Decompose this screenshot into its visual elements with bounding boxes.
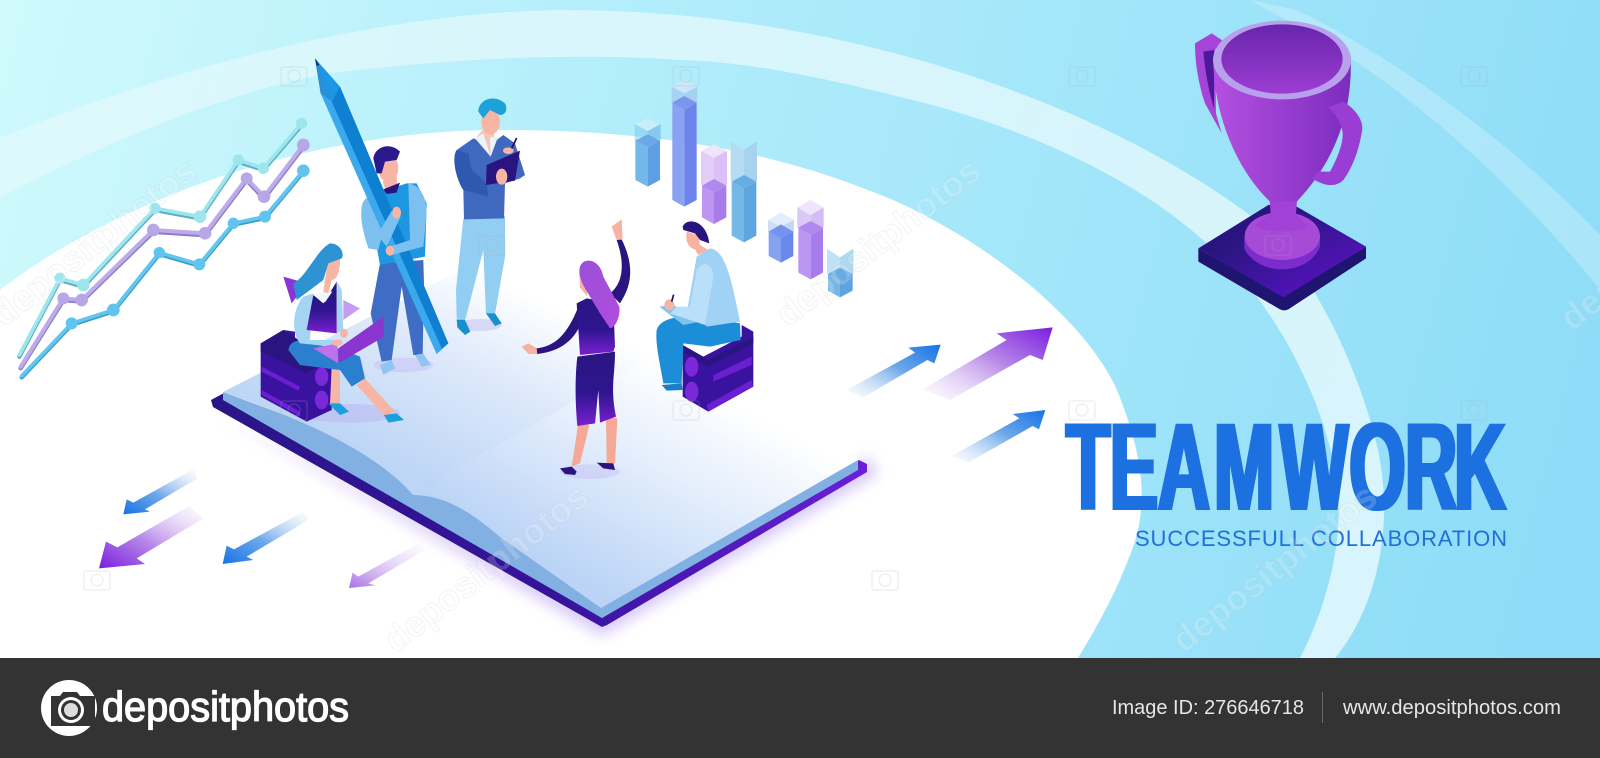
trophy base (1198, 205, 1366, 310)
chart line: purple (21, 139, 310, 368)
arrow: blue right lower (952, 410, 1045, 463)
website url: www.depositphotos.com (1342, 697, 1561, 719)
watermarks: depositphotos (376, 475, 596, 660)
thin top-right band (1250, 0, 1600, 290)
person: man writing in notebook (454, 98, 525, 335)
bar 1 (635, 118, 661, 187)
person: man carrying giant pencil (315, 58, 448, 375)
watermarks: depositphotos (1164, 475, 1384, 660)
person: woman with raised arm (522, 219, 630, 479)
trophy cup (1213, 57, 1351, 202)
trophy foot and stem (1244, 197, 1320, 269)
page edges (223, 392, 858, 618)
arrow: blue left upper (123, 469, 197, 514)
white floor ellipse (0, 130, 1142, 658)
bar 3 (701, 144, 727, 224)
people group left (261, 58, 525, 423)
chart line: cyan (19, 118, 307, 357)
watermarks: depositphotos (768, 149, 988, 334)
bar 2 (672, 80, 697, 207)
bar 7 (827, 249, 853, 297)
book shadow (215, 412, 878, 636)
arrow: blue right upper (847, 345, 941, 397)
light curved band (0, 10, 1384, 658)
line chart (19, 118, 310, 377)
giant pencil (315, 58, 448, 354)
arrow: blue left middle (223, 512, 308, 564)
subtitle: SUCCESSFULL COLLABORATION (1135, 526, 1507, 551)
trophy right handle (1312, 102, 1362, 185)
arrow: light purple left (349, 543, 425, 588)
bar 6 (797, 200, 824, 279)
watermarks (0, 67, 1600, 660)
open book (211, 245, 878, 636)
chart line: blue (22, 164, 310, 377)
title: TEAMWORK (1066, 397, 1506, 537)
bar 5 (768, 212, 794, 263)
footer logo icon (41, 680, 97, 736)
person: seated man taking notes (656, 221, 753, 412)
people group right (522, 219, 753, 479)
bar chart (635, 80, 853, 297)
trophy (1195, 21, 1366, 310)
arrow: purple right large (923, 327, 1053, 400)
bar 4 (731, 141, 757, 242)
book cover (211, 393, 867, 627)
footer divider (1322, 692, 1323, 723)
person: woman with laptop on books (261, 243, 404, 423)
right page (413, 352, 858, 608)
left page (223, 245, 660, 495)
arrow: purple left large (99, 506, 203, 568)
image id: Image ID: 276646718 (1112, 697, 1304, 719)
trophy rim (1213, 21, 1351, 99)
trophy interior (1221, 24, 1343, 94)
trophy left handle (1195, 33, 1223, 133)
footer logo wordmark: depositphotos (102, 683, 349, 730)
footer bar (0, 658, 1600, 758)
